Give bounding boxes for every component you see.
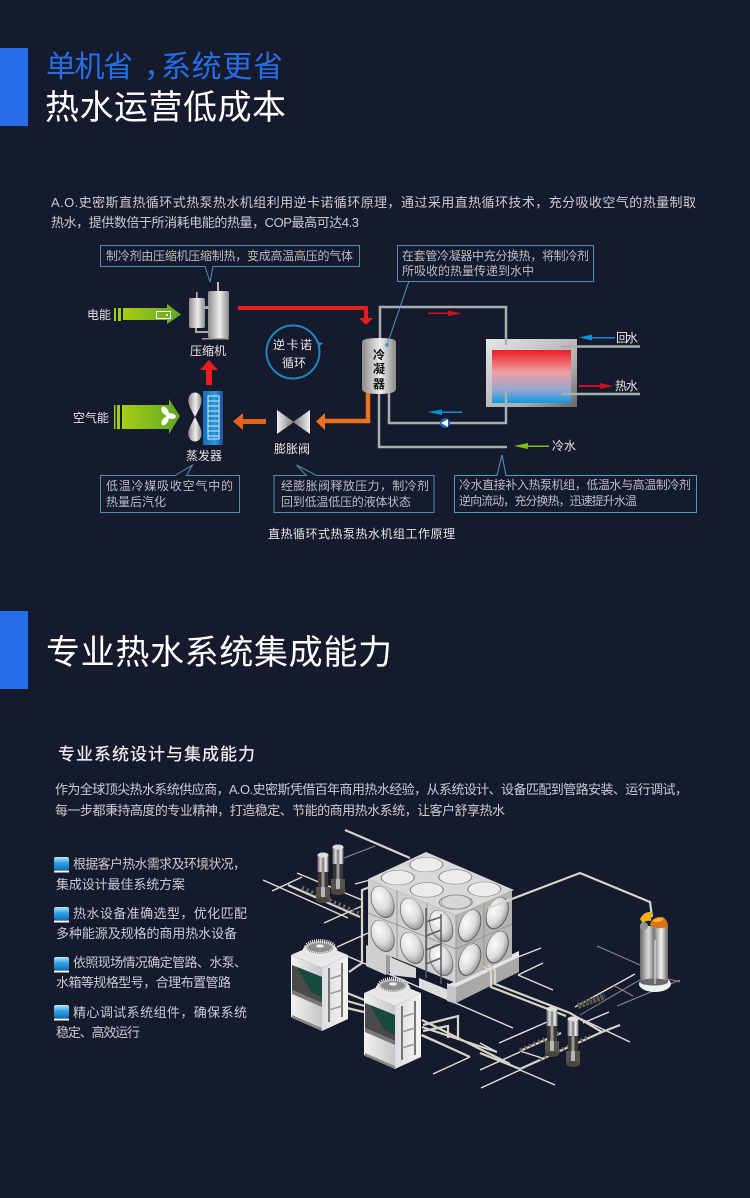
label: hot water: 热水: [615, 379, 638, 393]
outdoor unit 2: [364, 979, 421, 1069]
callout: condenser: 所吸收的热量传递到水中: [402, 263, 534, 278]
list item 1: [54, 856, 246, 892]
heading line blue: 系统更省: [161, 51, 283, 84]
list item 3: 依照现场情况确定管路、水泵、: [73, 955, 247, 970]
list item 2: [54, 906, 247, 941]
tank faces: [368, 852, 514, 915]
list item 2: 多种能源及规格的商用热水设备: [56, 926, 237, 941]
list item 4: 稳定、高效运行: [56, 1025, 140, 1040]
label: evaporator: 蒸发器: [186, 448, 222, 463]
intro paragraph: A.O.史密斯直热循环式热泵热水机组利用逆卡诺循环原理，通过采用直热循环技术，充分吸收空气的热量制取: [51, 195, 696, 210]
condenser callout leader: [385, 281, 409, 347]
compressor: [189, 282, 229, 340]
integration paragraph: [55, 782, 688, 818]
list item 2: 热水设备准确选型，优化匹配: [73, 906, 247, 921]
label: expansion valve: 膨胀阀: [274, 442, 310, 456]
hatch: [441, 895, 471, 909]
callout: evaporator: 热量后汽化: [106, 494, 166, 509]
flow arrow: return water: [579, 334, 615, 340]
right face panels: [458, 893, 509, 980]
callout: evaporator: [100, 465, 240, 512]
accent bar: [0, 611, 28, 689]
callout: compressor: [100, 246, 360, 282]
callout: compressor: 制冷剂由压缩机压缩制热，变成高温高压的气体: [106, 248, 353, 263]
pump symbol: [440, 418, 450, 428]
isometric water system illustration: [263, 830, 680, 1088]
label: electric energy: 电能: [87, 308, 111, 322]
section header: system integration: [0, 611, 392, 689]
icon: air energy arrow: [114, 399, 180, 434]
icon: fan blades: [188, 392, 202, 442]
diagram caption: 直热循环式热泵热水机组工作原理: [268, 527, 455, 541]
expansion valve: [277, 410, 310, 434]
subheading: 专业系统设计与集成能力: [58, 745, 255, 764]
list item 4: 精心调试系统组件，确保系统: [73, 1005, 247, 1020]
water heater: [639, 912, 671, 992]
flow arrow: hot water: [579, 383, 613, 389]
callout: condenser: [398, 246, 594, 282]
water circuit pipes: [379, 307, 507, 447]
list item 1: 根据客户热水需求及环境状况，: [73, 856, 246, 872]
refrigerant pipe: red hot gas: [238, 308, 373, 325]
callout: cold water: 冷水直接补入热泵机组，低温水与高温制冷剂: [459, 477, 691, 492]
panel seams: [368, 891, 512, 983]
section header: single unit savings: [0, 48, 286, 127]
condenser: 冷: [373, 347, 385, 362]
heading line blue: ，: [144, 51, 174, 84]
label: air energy: 空气能: [73, 410, 109, 425]
grey background lines: [344, 846, 680, 1015]
integration paragraph: 每一步都秉持高度的专业精神，打造稳定、节能的商用热水系统，让客户舒享热水: [55, 803, 505, 818]
ladder: [426, 908, 441, 984]
icon: electricity arrow: [114, 304, 181, 324]
condenser: 凝: [373, 361, 385, 376]
integration paragraph: 作为全球顶尖热水系统供应商，A.O.史密斯凭借百年商用热水经验，从系统设计、设备匹配到管路安装、运行调试，: [55, 782, 688, 797]
intro paragraph: [51, 195, 696, 230]
callout: expansion valve: 回到低温低压的液体状态: [281, 494, 411, 509]
stainless water tank: [368, 852, 514, 984]
evaporator: [203, 391, 223, 445]
main pipes in front of tank: [349, 873, 652, 1069]
flow arrow: blue lower: [428, 410, 462, 415]
intro paragraph: 热水，提供数倍于所消耗电能的热量，COP最高可达4.3: [51, 215, 359, 230]
flow arrow: cold water: [514, 443, 549, 449]
list item 1: 集成设计最佳系统方案: [56, 877, 185, 892]
top panels: [374, 854, 508, 913]
flow arrow: red upper: [428, 310, 462, 316]
water tank: [486, 339, 640, 407]
water tank supports: [366, 945, 519, 1004]
callout: condenser: 在套管冷凝器中充分换热，将制冷剂: [402, 248, 589, 263]
label: compressor: 压缩机: [190, 343, 226, 358]
diagram: heat pump working principle: [73, 246, 696, 541]
arrow: valve to evaporator: [233, 413, 266, 430]
pumps: left group: [302, 844, 360, 914]
main pipes behind equipment: [288, 830, 620, 1064]
background pipe lines: [263, 873, 635, 1088]
callout: expansion valve: [274, 465, 434, 512]
condenser: 器: [373, 377, 385, 391]
callout: evaporator: 低温冷媒吸收空气中的: [106, 478, 233, 493]
capability list: [54, 856, 247, 1040]
reverse carnot cycle loop: 逆卡诺: [273, 337, 312, 352]
heading line white: 热水运营低成本: [45, 89, 286, 127]
list item 3: 水箱等规格型号，合理布置管路: [56, 975, 231, 990]
outdoor unit 1: [291, 941, 348, 1031]
accent bar: [0, 48, 28, 126]
reverse carnot cycle loop: 循环: [282, 356, 306, 370]
arrow: evaporator to compressor: [200, 360, 218, 385]
reverse carnot cycle loop: [266, 326, 323, 378]
label: return water: 回水: [616, 331, 638, 345]
condenser: [362, 338, 396, 394]
heading line blue: 单机省: [46, 51, 133, 84]
list item 4: [54, 1005, 247, 1040]
left face panels: [371, 882, 453, 980]
pumps: right group: [520, 996, 605, 1067]
callout: expansion valve: 经膨胀阀释放压力，制冷剂: [281, 478, 429, 493]
list item 3: [54, 955, 247, 990]
label: cold water: 冷水: [552, 439, 576, 453]
heading: 专业热水系统集成能力: [46, 634, 392, 672]
callout: cold water: [454, 455, 696, 512]
refrigerant pipe: orange liquid: [316, 392, 368, 430]
callout: cold water: 逆向流动，充分换热，迅速提升水温: [459, 493, 637, 508]
